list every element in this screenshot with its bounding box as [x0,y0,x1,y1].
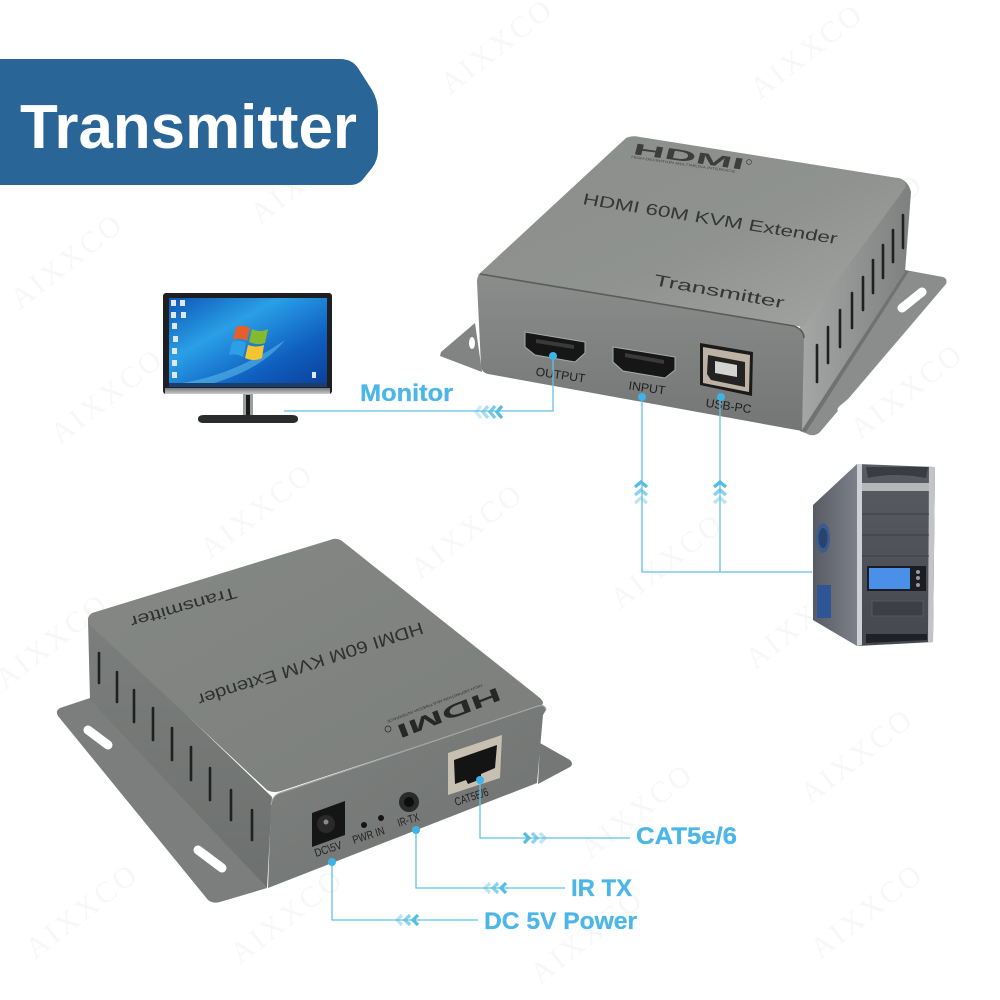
monitor illustration [163,293,332,423]
device: top transmitter [440,136,947,435]
port labels: INPUT [628,378,667,398]
watermark pattern: AIXXCO [404,477,530,586]
watermark pattern: AIXXCO [224,862,350,971]
top face [88,539,543,792]
front face [477,274,804,431]
port: IR jack [399,792,419,812]
watermark pattern: AIXXCO [844,337,970,446]
top face printed text: HIGH-DEFINITION MULTIMEDIA INTERFACE [386,683,483,724]
top face printed text [127,583,504,741]
connector: IR TX [412,826,565,893]
right mounting flange [538,743,572,784]
watermark pattern: AIXXCO [244,122,370,231]
watermark pattern: AIXXCO [574,757,700,866]
port: HDMI input [613,347,675,378]
port: HDMI output [525,332,585,362]
watermark pattern: AIXXCO [19,857,145,966]
watermark pattern: AIXXCO [804,857,930,966]
label: IR TX: IR TX [571,875,632,902]
top face [478,136,906,327]
PWR and IN indicators [361,815,384,828]
side face [800,178,911,430]
port labels [313,787,490,860]
label: DC 5V Power: DC 5V Power [484,908,637,935]
left mounting flange [57,698,267,903]
top face printed text: HDMI [631,141,746,174]
top face printed text: HDMI 60M KVM Extender [581,191,840,248]
port labels: CAT5E/6 [453,787,490,809]
port labels: IR-TX [396,812,421,830]
port: DC jack [312,801,345,847]
watermark pattern: AIXXCO [44,342,170,451]
side face [88,620,272,888]
label: CAT5e/6: CAT5e/6 [636,823,737,850]
port labels [535,365,753,416]
connector: monitor to OUTPUT [284,352,557,418]
right mounting flange [800,268,947,435]
computer tower illustration [813,464,935,646]
watermark pattern: AIXXCO [794,702,920,811]
port labels: USB-PC [705,396,753,416]
device: bottom transmitter [57,539,572,903]
watermark pattern: AIXXCO [194,457,320,566]
connector: CAT5e/6 [476,776,630,843]
ventilation slots [817,215,903,382]
port labels: PWR IN [351,825,386,847]
top face printed text [581,141,840,312]
top face printed text: HDMI 60M KVM Extender [195,618,426,709]
watermark pattern: AIXXCO [524,882,650,991]
top face printed text: HDMI [394,682,504,741]
connector: DC 5V Power [328,858,478,925]
port: USB-B [700,343,753,396]
top face printed text: Transmitter [127,583,239,630]
title banner: Transmitter [20,93,357,162]
port: RJ45 [448,735,502,795]
ventilation slots [99,653,252,840]
front face [268,706,546,888]
port labels: DC\5V [313,840,344,860]
watermark pattern: AIXXCO [739,567,865,676]
label: Monitor: Monitor [360,380,453,407]
watermark pattern: AIXXCO [804,167,930,276]
title banner [0,59,378,185]
top face printed text: HIGH-DEFINITION MULTIMEDIA INTERFACE [631,155,737,174]
port labels: OUTPUT [535,365,587,386]
watermark pattern: AIXXCO [4,207,130,316]
connector: computer to INPUT and USB-PC [635,393,812,572]
top face printed text: Transmitter [652,272,787,312]
left mounting flange [440,323,482,372]
watermark pattern: AIXXCO [604,507,730,616]
